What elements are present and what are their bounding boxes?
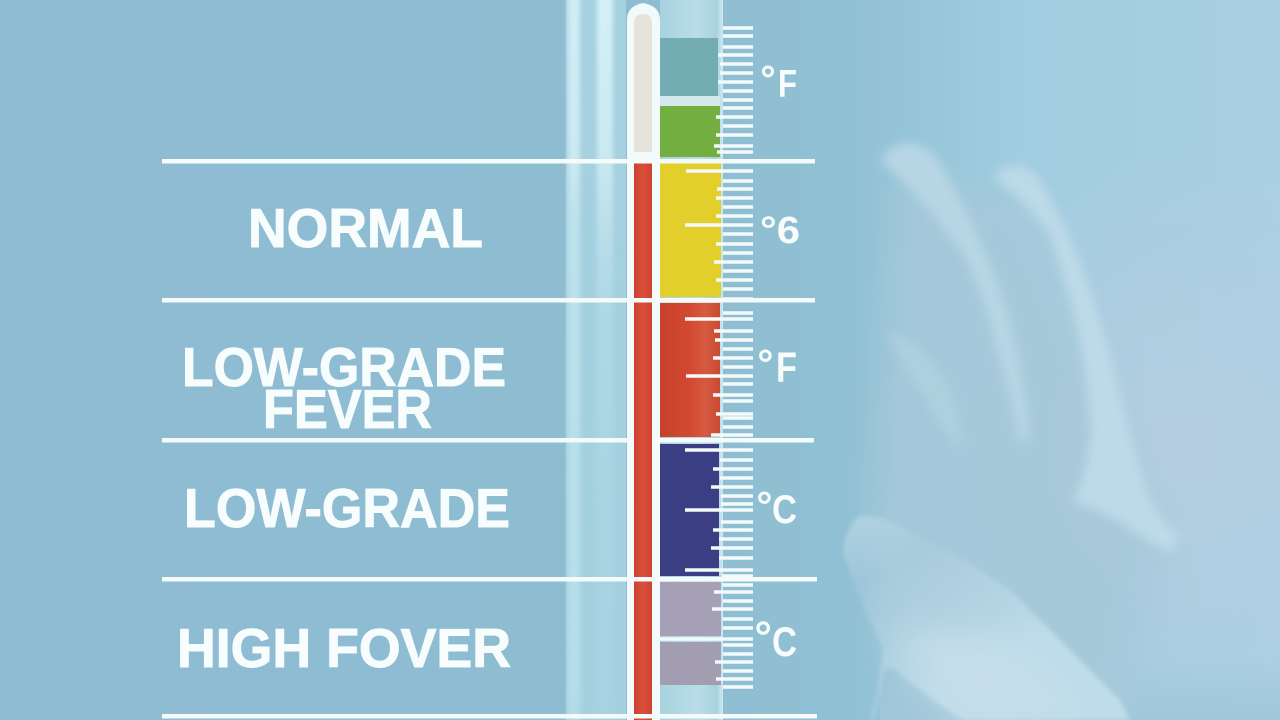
scale band: pale gap: [660, 96, 720, 106]
unit: degrees C (bottom): C: [772, 618, 797, 665]
label: LOW-GRADE FEVER: [182, 336, 506, 440]
ruler tick marks: [660, 28, 753, 687]
thermometer capillary casing: [627, 3, 660, 720]
mercury column: empty part: [634, 14, 652, 152]
scale band: green: [660, 106, 720, 157]
illustration: faded hand: [843, 143, 1180, 720]
unit: degrees F (top): °: [760, 59, 776, 103]
unit: degrees F (middle): F: [776, 344, 797, 392]
label: NORMAL: NORMAL: [248, 197, 483, 259]
unit: degrees F (top): [760, 59, 797, 106]
glass tube: right: [660, 0, 723, 720]
unit: degrees F (middle): °: [757, 341, 774, 388]
scale band: yellow: [660, 163, 721, 297]
scale band: red: [660, 303, 720, 437]
unit: degrees C (middle): °: [756, 483, 773, 530]
unit: degrees C (middle): [756, 483, 797, 532]
mercury column: red: [634, 163, 652, 720]
unit: degrees C (bottom): [754, 612, 797, 665]
glass tube: left: [566, 0, 626, 720]
scale band: navy: [660, 444, 719, 576]
scale band: grey lower: [660, 642, 721, 685]
unit: degrees C (middle): C: [772, 488, 797, 532]
unit: degrees F (middle): [757, 341, 797, 392]
label: HIGH FOVER: HIGH FOVER: [177, 617, 511, 679]
scale band: teal: [660, 38, 718, 96]
unit: degrees F (top): F: [778, 63, 797, 106]
label: LOW-GRADE FEVER: FEVER: [263, 378, 432, 440]
scale band: grey upper: [660, 582, 721, 636]
divider lines: [162, 159, 817, 718]
unit: garbled degrees mark: °6: [760, 210, 800, 252]
label: LOW-GRADE: LOW-GRADE: [184, 477, 510, 539]
label: LOW-GRADE FEVER: LOW-GRADE: [182, 336, 506, 398]
unit: degrees C (bottom): °: [754, 612, 772, 664]
